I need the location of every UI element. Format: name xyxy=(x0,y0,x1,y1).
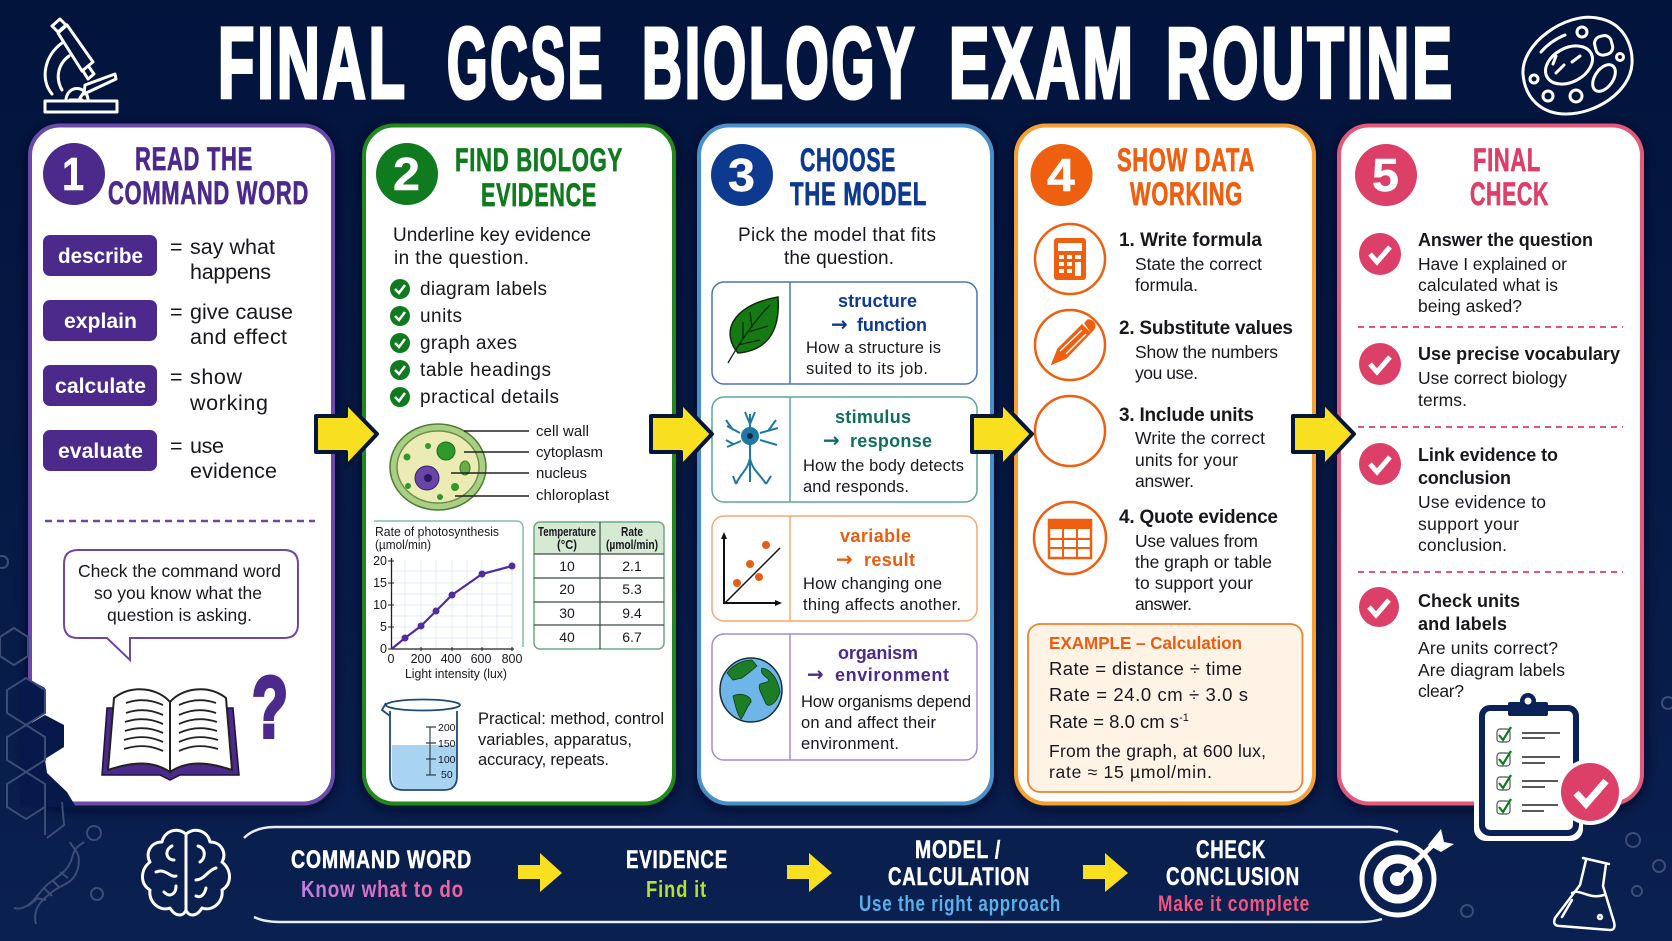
command word: describe xyxy=(43,235,275,284)
line graph: rate of photosynthesis: Rate of photosynthesis xyxy=(375,524,499,539)
icon: calculator xyxy=(1035,224,1105,294)
intro text: in the question. xyxy=(394,248,529,269)
heading: FIND BIOLOGY xyxy=(455,142,623,178)
command word: describe: say what xyxy=(190,235,275,259)
intro text: Underline key evidence xyxy=(393,225,591,246)
heading: COMMAND WORD xyxy=(108,175,309,211)
arrow xyxy=(518,853,562,892)
plant cell diagram: cytoplasm xyxy=(536,444,603,461)
line graph: rate of photosynthesis: 15 xyxy=(373,576,387,590)
command word: describe: describe xyxy=(58,244,143,268)
step 3: include units: 3. Include units xyxy=(1119,405,1254,426)
icon: leaf xyxy=(728,297,778,363)
step 2: substitute values: 2. Substitute values xyxy=(1119,318,1293,339)
model card: organism to environment: organism xyxy=(838,643,918,663)
step 4: quote evidence: the graph or table xyxy=(1135,552,1272,572)
stage: evidence: EVIDENCE xyxy=(626,846,728,874)
stage: check conclusion: CONCLUSION xyxy=(1166,863,1300,891)
step 4: quote evidence: Use values from xyxy=(1135,531,1258,551)
icon: beaker: 50 xyxy=(441,769,453,781)
example calculation box: From the graph, at 600 lux, xyxy=(1049,741,1266,761)
icon: microscope xyxy=(45,19,117,112)
check: use precise vocabulary: Use correct biology xyxy=(1418,368,1567,388)
speech bubble: Check the command word xyxy=(78,561,281,581)
number badge 3: 3 xyxy=(728,149,756,201)
line graph: rate of photosynthesis: (µmol/min) xyxy=(375,537,431,552)
check: link evidence to conclusion: Use evidence to xyxy=(1418,492,1546,512)
check: answer the question: Have I explained or xyxy=(1418,254,1567,274)
step 2: substitute values: you use. xyxy=(1135,363,1198,383)
step 4: quote evidence: 4. Quote evidence xyxy=(1119,507,1278,528)
icon: globe xyxy=(720,658,782,722)
command word: evaluate: use xyxy=(190,434,224,458)
command word: evaluate: = xyxy=(170,434,183,458)
step 2: substitute values: Show the numbers xyxy=(1135,342,1278,362)
step 4: quote evidence: to support your xyxy=(1135,573,1253,593)
evidence checklist: table headings xyxy=(420,360,551,381)
heading: FINAL xyxy=(1473,142,1541,178)
heading: THE MODEL xyxy=(790,176,927,212)
plant cell diagram: nucleus xyxy=(536,465,587,482)
model card: structure to function xyxy=(712,282,977,384)
command word: calculate: show xyxy=(190,365,242,389)
icon: question mark: ? xyxy=(252,660,288,756)
stage: command word xyxy=(291,846,472,902)
command word: explain: explain xyxy=(64,309,137,333)
arrow xyxy=(1083,853,1128,892)
data table: 30 xyxy=(559,605,575,621)
practical note: Practical: method, control xyxy=(478,710,664,728)
check: link evidence to conclusion xyxy=(1359,443,1558,555)
data table: (µmol/min) xyxy=(606,538,658,552)
model card: stimulus to response: response xyxy=(850,431,932,451)
example calculation box: Rate = 8.0 cm s xyxy=(1049,711,1179,732)
number badge 5 xyxy=(1355,144,1417,206)
heading xyxy=(1470,142,1549,212)
panel 1: read the command word xyxy=(30,126,333,804)
model card: stimulus to response: → xyxy=(823,428,840,452)
icon: brain xyxy=(142,830,230,915)
model card: organism to environment: environment. xyxy=(801,735,899,753)
command word: explain: = xyxy=(170,300,183,324)
model card: structure to function: structure xyxy=(838,291,917,311)
intro text xyxy=(738,225,936,269)
model card: organism to environment: on and affect their xyxy=(801,714,936,732)
data table: 5.3 xyxy=(622,581,642,597)
icon: pencil xyxy=(1035,310,1105,380)
command word: explain xyxy=(43,300,293,349)
check: answer the question xyxy=(1359,230,1593,316)
model card: variable to result: → xyxy=(836,547,853,571)
model card: variable to result xyxy=(712,516,977,621)
step 1: write formula xyxy=(1035,224,1262,295)
plant cell diagram: cell wall xyxy=(536,423,589,440)
step 3: include units: Write the correct xyxy=(1135,428,1265,448)
check: answer the question: being asked? xyxy=(1418,296,1522,316)
model card: variable to result: How changing one xyxy=(803,575,942,593)
arrow 2 to 3 xyxy=(651,402,712,467)
icon: empty circle xyxy=(1035,396,1105,466)
line graph: rate of photosynthesis: 0 xyxy=(380,642,387,656)
intro text: Pick the model that fits xyxy=(738,225,936,246)
model card: structure to function: How a structure is xyxy=(806,339,941,357)
model card: organism to environment: How organisms depend xyxy=(801,693,971,711)
model card: structure to function: → xyxy=(831,312,848,336)
practical note xyxy=(478,710,664,769)
icon: table xyxy=(1034,502,1106,574)
heading: WORKING xyxy=(1130,176,1243,212)
heading xyxy=(1117,142,1255,212)
icon: cell xyxy=(1523,17,1632,114)
title: BIOLOGY xyxy=(642,8,917,120)
line graph: rate of photosynthesis: 10 xyxy=(373,598,387,612)
command word: explain: and effect xyxy=(190,325,287,349)
icon: beaker: 150 xyxy=(438,738,456,750)
model card: structure to function: suited to its job. xyxy=(806,360,928,378)
line graph: rate of photosynthesis: 800 xyxy=(502,652,522,666)
line graph: rate of photosynthesis: 5 xyxy=(380,620,387,634)
heading: READ THE xyxy=(135,141,253,177)
arrow 1 to 2 xyxy=(316,402,377,467)
example calculation box: Rate = 24.0 cm ÷ 3.0 s xyxy=(1049,684,1248,705)
data table: (°C) xyxy=(557,538,577,552)
model card: organism to environment: environment xyxy=(835,665,949,685)
command word: explain: give cause xyxy=(190,300,293,324)
title: GCSE xyxy=(447,8,605,120)
heading: EVIDENCE xyxy=(481,177,597,213)
stage: model or calculation xyxy=(859,836,1061,916)
plant cell diagram xyxy=(390,423,610,510)
stage: evidence: Find it xyxy=(646,876,707,902)
command word: describe: = xyxy=(170,235,183,259)
model card: stimulus to response: How the body detects xyxy=(803,457,964,475)
data table: 9.4 xyxy=(622,605,642,621)
check: units and labels: Are diagram labels xyxy=(1418,660,1565,680)
line graph: rate of photosynthesis: 20 xyxy=(373,554,387,568)
check: units and labels: Are units correct? xyxy=(1418,638,1558,658)
evidence checklist: units xyxy=(420,306,462,327)
panel 2: find biology evidence xyxy=(364,126,674,804)
model card: organism to environment: → xyxy=(807,662,824,686)
evidence checklist: practical details xyxy=(420,387,559,408)
model card: stimulus to response: stimulus xyxy=(835,407,911,427)
command word: calculate: calculate xyxy=(55,374,146,398)
number badge 2: 2 xyxy=(393,148,421,200)
heading xyxy=(108,141,309,211)
step 1: write formula: formula. xyxy=(1135,275,1198,295)
icon: clipboard with checklist xyxy=(1474,693,1623,841)
check: units and labels xyxy=(1359,587,1565,701)
check: use precise vocabulary: Use precise vocabulary xyxy=(1418,344,1620,364)
command word: calculate xyxy=(43,365,268,415)
number badge 1 xyxy=(43,143,105,205)
data table: Rate xyxy=(621,525,643,539)
example calculation box: Rate = distance ÷ time xyxy=(1049,658,1242,679)
molecule and DNA background decoration xyxy=(0,556,103,924)
model card: variable to result: variable xyxy=(840,526,911,546)
intro text xyxy=(393,225,591,269)
line graph: rate of photosynthesis: 0 xyxy=(388,652,395,666)
example calculation box: -1 xyxy=(1179,712,1189,724)
data table: Temperature xyxy=(538,525,596,539)
command word: evaluate xyxy=(43,430,277,483)
heading xyxy=(455,142,623,213)
number badge 5: 5 xyxy=(1372,149,1400,201)
step 4: quote evidence xyxy=(1034,502,1278,614)
intro text: the question. xyxy=(784,248,894,269)
speech bubble: so you know what the xyxy=(94,583,262,603)
line graph: rate of photosynthesis: 200 xyxy=(411,652,431,666)
model card: variable to result: thing affects another. xyxy=(803,596,961,614)
number badge 4 xyxy=(1030,144,1092,206)
step 1: write formula: 1. Write formula xyxy=(1119,230,1262,251)
icon: beaker xyxy=(382,700,460,790)
heading: CHOOSE xyxy=(800,142,896,178)
arrow 4 to 5 xyxy=(1293,402,1354,467)
heading xyxy=(790,142,927,212)
arrow xyxy=(787,853,832,892)
model card: variable to result: result xyxy=(864,550,915,570)
stage: check conclusion xyxy=(1158,836,1310,916)
check: use precise vocabulary xyxy=(1359,343,1620,410)
step 4: quote evidence: answer. xyxy=(1135,594,1192,614)
stage: check conclusion: CHECK xyxy=(1196,836,1266,864)
evidence checklist xyxy=(390,279,559,408)
title: EXAM xyxy=(949,8,1136,120)
step 3: include units xyxy=(1035,396,1265,491)
title: FINAL xyxy=(218,8,408,120)
line graph: rate of photosynthesis xyxy=(373,521,523,681)
icon: open book xyxy=(102,689,239,780)
command word: calculate: = xyxy=(170,365,183,389)
data table: 6.7 xyxy=(622,629,642,645)
arrow 3 to 4 xyxy=(972,402,1032,467)
stage: command word: COMMAND WORD xyxy=(291,846,472,874)
title: ROUTINE xyxy=(1166,8,1455,120)
line graph: rate of photosynthesis: Light intensity (lux) xyxy=(405,666,507,681)
command word: evaluate: evaluate xyxy=(58,439,143,463)
check: link evidence to conclusion: conclusion. xyxy=(1418,535,1507,555)
icon: target with arrow xyxy=(1362,829,1454,915)
data table: 40 xyxy=(559,629,575,645)
icon: scatter graph xyxy=(721,532,782,606)
icon: neuron xyxy=(726,412,778,484)
example calculation box: rate ≈ 15 µmol/min. xyxy=(1049,762,1212,782)
example calculation box: EXAMPLE – Calculation xyxy=(1049,633,1242,653)
check: answer the question: calculated what is xyxy=(1418,275,1558,295)
practical note: variables, apparatus, xyxy=(478,731,632,749)
summary band xyxy=(244,827,1398,922)
evidence checklist: graph axes xyxy=(420,333,517,354)
stage: model or calculation: Use the right approach xyxy=(859,891,1061,916)
step 3: include units: answer. xyxy=(1135,471,1194,491)
evidence checklist: diagram labels xyxy=(420,279,547,300)
icon: beaker: 100 xyxy=(438,754,456,766)
number badge 1: 1 xyxy=(62,148,85,200)
command word: evaluate: evidence xyxy=(190,459,277,483)
background bubbles right xyxy=(1461,697,1672,917)
stage: command word: Know what to do xyxy=(301,876,464,902)
data table: 20 xyxy=(559,581,575,597)
example calculation box xyxy=(1028,624,1302,792)
icon: beaker: 200 xyxy=(438,722,456,734)
plant cell diagram: chloroplast xyxy=(536,487,610,504)
stage: model or calculation: MODEL / xyxy=(915,836,1001,864)
check: use precise vocabulary: terms. xyxy=(1418,390,1467,410)
number badge 3 xyxy=(711,144,773,206)
model card: organism to environment xyxy=(712,634,977,760)
icon: conical flask xyxy=(1554,858,1614,930)
data table xyxy=(534,522,664,649)
step 2: substitute values xyxy=(1035,310,1293,383)
practical note: accuracy, repeats. xyxy=(478,751,609,769)
data table: 10 xyxy=(559,558,575,574)
model card: structure to function: function xyxy=(857,315,927,335)
check: units and labels: Check units xyxy=(1418,591,1520,611)
data table: 2.1 xyxy=(622,558,642,574)
model card: stimulus to response xyxy=(712,397,977,502)
command word: calculate: working xyxy=(189,391,268,415)
title xyxy=(218,8,1455,120)
check: answer the question: Answer the question xyxy=(1418,230,1593,250)
check: units and labels: clear? xyxy=(1418,681,1464,701)
panel 3: choose the model xyxy=(699,126,992,804)
command word: describe: happens xyxy=(190,260,271,284)
stage: check conclusion: Make it complete xyxy=(1158,891,1310,916)
number badge 4: 4 xyxy=(1047,149,1076,201)
number badge 2 xyxy=(376,143,438,205)
stage: model or calculation: CALCULATION xyxy=(888,863,1030,891)
line graph: rate of photosynthesis: 400 xyxy=(441,652,461,666)
line graph: rate of photosynthesis: 600 xyxy=(471,652,491,666)
step 3: include units: units for your xyxy=(1135,450,1238,470)
check: link evidence to conclusion: Link evidence to xyxy=(1418,445,1558,465)
heading: CHECK xyxy=(1470,176,1549,212)
speech bubble: question is asking. xyxy=(107,605,252,625)
check: link evidence to conclusion: support your xyxy=(1418,514,1519,534)
heading: SHOW DATA xyxy=(1117,142,1255,178)
check: link evidence to conclusion: conclusion xyxy=(1418,468,1511,488)
stage: evidence xyxy=(626,846,728,902)
speech bubble xyxy=(64,550,298,660)
hexagon cut-outs over panel 1 xyxy=(20,674,76,807)
step 1: write formula: State the correct xyxy=(1135,254,1262,274)
panel 5: final check xyxy=(1339,126,1642,804)
panel 4: show data working xyxy=(1016,126,1314,804)
model card: stimulus to response: and responds. xyxy=(803,478,909,496)
check: units and labels: and labels xyxy=(1418,614,1507,634)
